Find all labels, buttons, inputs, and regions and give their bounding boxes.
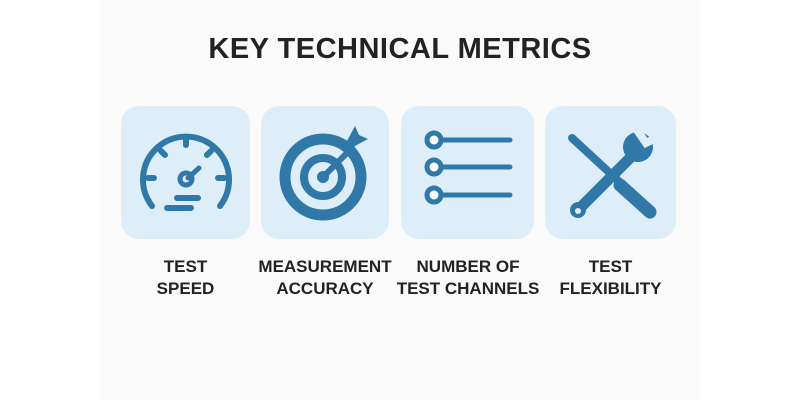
label: test speed: SPEED (157, 279, 214, 298)
label: number of test channels: TEST CHANNELS (397, 279, 539, 298)
panel: test flexibility (545, 106, 676, 239)
label: test speed: TEST (164, 257, 207, 276)
panel: test speed (121, 106, 250, 239)
label: number of test channels: NUMBER OF (417, 257, 519, 276)
label: test flexibility: FLEXIBILITY (560, 279, 662, 298)
title: KEY TECHNICAL METRICS (208, 33, 592, 65)
panel: number of test channels (401, 106, 534, 239)
label: test flexibility: TEST (589, 257, 632, 276)
label: test flexibility (560, 257, 662, 298)
label: measurement accuracy: MEASUREMENT (258, 257, 392, 276)
label: number of test channels (396, 257, 539, 298)
label: test speed (157, 257, 214, 298)
label: measurement accuracy: ACCURACY (276, 279, 374, 298)
panel: measurement accuracy (261, 106, 389, 239)
label: measurement accuracy (258, 257, 392, 298)
